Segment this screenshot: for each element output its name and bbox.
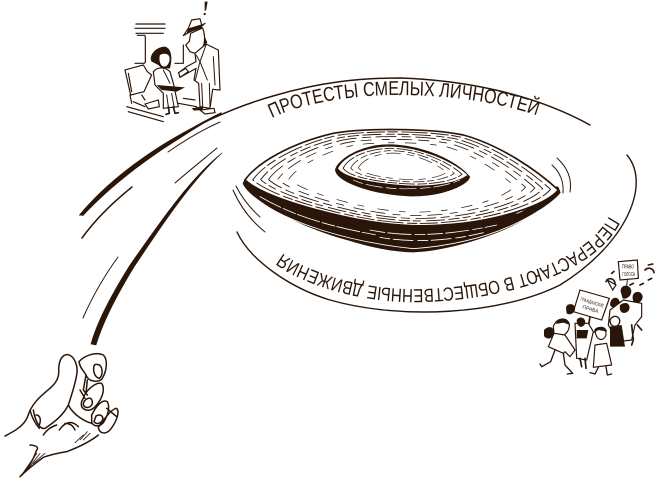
seated woman <box>145 47 185 114</box>
large placard: ПРАВА <box>582 304 600 315</box>
standing man in hat <box>179 19 220 114</box>
illustration: marching protest crowd with placards <box>540 260 654 375</box>
exclamation mark <box>203 2 208 15</box>
trajectory: flying disc swoosh arcs <box>80 78 636 345</box>
thumb and back of hand <box>5 355 77 436</box>
large placard: ГРАЖДАНСКИЕ <box>580 297 605 310</box>
illustration: throwing hand <box>5 354 118 477</box>
bus interior <box>125 24 197 122</box>
background marchers <box>606 264 654 347</box>
white highlights on disc rim <box>253 193 552 249</box>
curved label: bottom: ПЕРЕРАСТАЮТ В ОБЩЕСТВЕННЫЕ ДВИЖЕНИЯ <box>276 217 620 302</box>
small placard <box>618 260 638 286</box>
lower throw arc <box>91 153 222 345</box>
small placard: ГОЛОСА <box>622 272 635 278</box>
disc base <box>243 178 561 252</box>
large placard <box>573 290 609 333</box>
stepped disc <box>243 130 561 252</box>
front marchers <box>540 304 612 375</box>
lower orbit arc <box>237 155 636 312</box>
upper throw arc <box>80 78 590 215</box>
illustration: man and seated woman on a bus <box>125 2 220 122</box>
disc surface hatching <box>253 132 550 223</box>
central hill <box>335 144 470 196</box>
fingers <box>79 354 106 381</box>
disc top face <box>245 130 558 226</box>
small placard: ПРАВО <box>622 265 634 271</box>
motion lines <box>82 122 220 318</box>
curved label: top: ПРОТЕСТЫ СМЕЛЫХ ЛИЧНОСТЕЙ <box>267 81 540 118</box>
disc motion lines <box>233 158 570 232</box>
palm and wrist <box>20 375 98 477</box>
